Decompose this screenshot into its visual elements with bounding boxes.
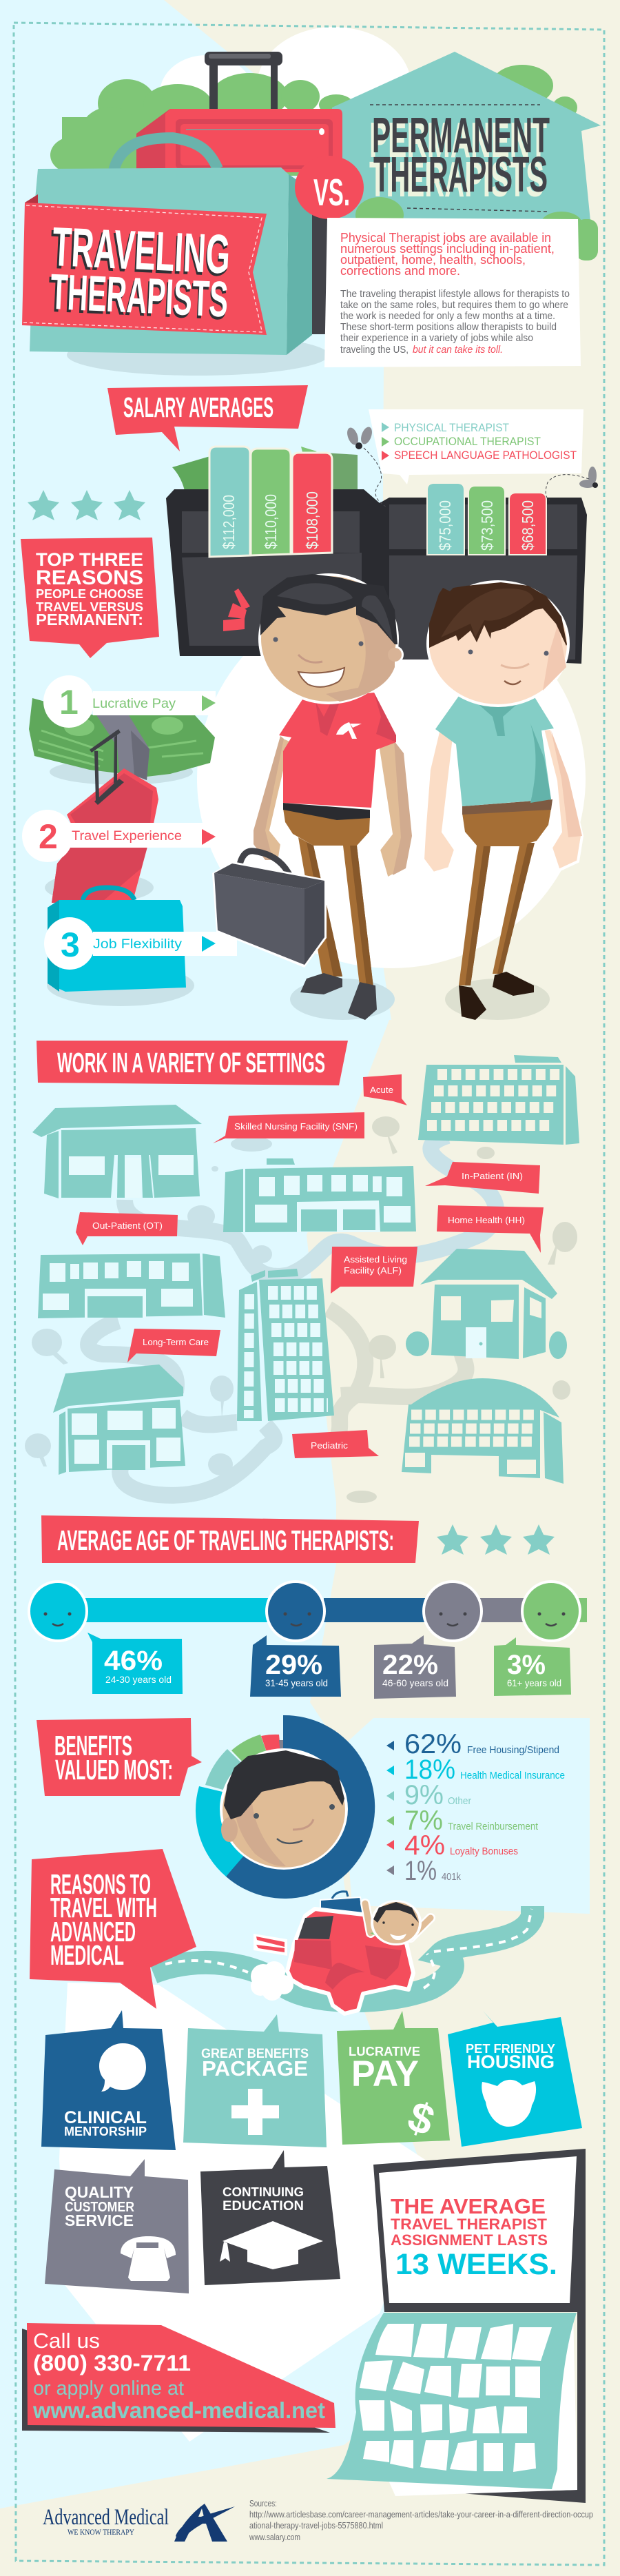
building: tower	[237, 1269, 334, 1421]
panel: intro text: but it can take its toll.	[413, 345, 503, 356]
stat: 62%	[386, 1729, 559, 1759]
callout: reasons to travel: MEDICAL	[50, 1939, 124, 1971]
card: continuing education: EDUCATION	[223, 2199, 304, 2214]
pants and belt	[283, 808, 370, 846]
panel: intro text: their experience in a variety of jobs while also	[340, 333, 533, 344]
illustration: luggage and house header	[22, 52, 601, 376]
wallets salary chart	[166, 447, 587, 664]
stat: 18%	[386, 1755, 565, 1785]
building: outpatient	[38, 1254, 225, 1318]
card: continuing education: CONTINUING	[223, 2185, 304, 2199]
heading: salary averages: SALARY AVERAGES	[123, 391, 273, 423]
stat: 18%: 18%	[404, 1755, 455, 1785]
character: permanent therapist	[423, 580, 582, 1020]
stat: 1%	[386, 1856, 462, 1886]
reason 3: Job Flexibility	[93, 937, 183, 952]
icon: briefcase	[212, 851, 327, 968]
salary values: permanent	[436, 500, 537, 551]
icon: calendar	[327, 2149, 586, 2503]
salary values: traveling: $108,000	[303, 491, 321, 549]
salary values: permanent: $68,500	[519, 500, 537, 551]
pants and belt	[462, 808, 551, 846]
label: assisted living: Facility (ALF)	[344, 1265, 402, 1276]
heading: benefits valued most: VALUED MOST:	[55, 1754, 173, 1786]
callout: 22%	[374, 1635, 456, 1699]
road network: settings	[88, 1136, 496, 1495]
stat: 62%: 62%	[404, 1729, 462, 1759]
panel: intro text: numerous settings including in-patient,	[340, 242, 555, 256]
callout: reasons to travel	[30, 1849, 196, 2009]
callout: 22%: 46-60 years old	[382, 1677, 448, 1688]
shadow under teal case	[67, 334, 329, 376]
callout: contact	[22, 2323, 335, 2433]
card: great benefits package: PACKAGE	[202, 2056, 308, 2081]
stat: 9%: Other	[448, 1796, 471, 1807]
callout: top three reasons: TRAVEL VERSUS	[36, 600, 143, 614]
label: snf: Skilled Nursing Facility (SNF)	[234, 1121, 358, 1132]
legs	[459, 843, 535, 985]
sources: ational-therapy-travel-jobs-5575880.html	[249, 2521, 383, 2531]
house	[331, 52, 601, 227]
stars left	[28, 490, 145, 520]
card: lucrative pay	[337, 2011, 450, 2145]
icon: pet head	[482, 2080, 536, 2127]
callout: top three reasons	[21, 538, 159, 658]
card: lucrative pay: $	[402, 2092, 440, 2145]
heading: benefits valued most: BENEFITS	[54, 1730, 132, 1761]
bag on car	[320, 1897, 363, 1914]
callout: 46%	[87, 1633, 183, 1694]
panel: intro text	[324, 218, 581, 367]
shirt	[279, 693, 396, 808]
icon: plus	[231, 2089, 279, 2135]
dust cloud	[251, 1961, 293, 2001]
icon: teal case	[30, 138, 312, 355]
heading: settings: WORK IN A VARIETY OF SETTINGS	[57, 1047, 325, 1079]
building: long-term care	[53, 1364, 185, 1475]
legend: OCCUPATIONAL THERAPIST	[394, 435, 541, 448]
building: home	[406, 1249, 567, 1359]
salary values: permanent: $73,500	[478, 500, 496, 551]
face: 24-30	[29, 1582, 87, 1641]
stat: 9%	[386, 1780, 471, 1810]
ribbon: traveling therapists: THERAPISTS	[49, 264, 229, 328]
label: assisted living	[331, 1247, 417, 1294]
wallet body	[166, 489, 587, 664]
icon: graduation cap	[220, 2221, 323, 2269]
panel: intro text: Physical Therapist jobs are available in	[340, 231, 551, 245]
callout: top three reasons: PERMANENT:	[36, 611, 143, 628]
motion lines	[254, 1934, 287, 1956]
heading: settings	[37, 1041, 348, 1085]
panel: intro text: traveling the US,	[340, 345, 409, 356]
shirt	[435, 696, 554, 806]
donut chart: benefits	[196, 1715, 375, 1899]
heading: average age	[41, 1515, 419, 1563]
building: inpatient	[223, 1158, 416, 1232]
head	[258, 573, 399, 704]
stat: 18%: Health Medical Insurance	[460, 1770, 565, 1781]
stat: 9%: 9%	[404, 1780, 444, 1810]
label: acute	[363, 1074, 407, 1105]
card: pet friendly housing	[448, 2011, 582, 2147]
label: long-term care: Long-Term Care	[143, 1337, 209, 1347]
panel: intro text: the work is needed for only a few months at a time.	[340, 311, 555, 322]
character: traveling therapist	[254, 573, 412, 1020]
label: in-patient: In-Patient (IN)	[462, 1171, 523, 1181]
face: 31-45	[267, 1582, 324, 1641]
callout: 29%: 31-45 years old	[265, 1677, 328, 1688]
ribbon: traveling therapists: TRAVELING	[51, 216, 231, 285]
card: lucrative pay: LUCRATIVE	[349, 2045, 420, 2058]
legend	[369, 409, 583, 484]
timeline: age groups	[29, 1582, 587, 1641]
callout: 29%	[250, 1635, 341, 1697]
card: great benefits package: GREAT BENEFITS	[201, 2047, 309, 2061]
reason 2: 2	[39, 817, 58, 856]
legend: benefits	[386, 1729, 565, 1886]
callout: top three reasons: REASONS	[36, 566, 143, 589]
label: pediatric	[292, 1430, 379, 1458]
stat: 4%: Loyalty Bonuses	[450, 1846, 518, 1857]
vs badge: VS.	[313, 171, 350, 214]
callout: reasons to travel: REASONS TO	[50, 1868, 151, 1900]
salary values: permanent: $75,000	[436, 500, 454, 551]
label: snf	[213, 1112, 364, 1143]
reason 3: 3	[61, 926, 80, 964]
label: assisted living: Assisted Living	[344, 1254, 407, 1265]
legs	[298, 837, 373, 987]
icon: flies	[345, 425, 598, 507]
label: home health	[437, 1205, 544, 1253]
icon: speech bubble	[99, 2043, 146, 2092]
callout: reasons to travel: TRAVEL WITH	[50, 1892, 157, 1923]
icon: logo mark	[174, 2504, 235, 2542]
stat: 7%: Travel Reinbursement	[448, 1821, 538, 1832]
stat: 4%: 4%	[404, 1830, 445, 1861]
vs badge	[295, 156, 364, 219]
shoes	[459, 985, 486, 1020]
footer logo: WE KNOW THERAPY	[68, 2527, 134, 2537]
bars: traveling salaries	[209, 447, 332, 557]
callout: top three reasons: PEOPLE CHOOSE	[36, 587, 143, 601]
callout: 3%: 61+ years old	[507, 1677, 561, 1688]
heading: salary averages	[107, 385, 308, 451]
arms	[254, 736, 291, 861]
footer logo: Advanced Medical	[43, 2505, 169, 2530]
stat: 7%: 7%	[404, 1806, 443, 1836]
label: out-patient: Out-Patient (OT)	[92, 1220, 163, 1231]
house bushes	[355, 197, 598, 260]
calendar sheet	[327, 2313, 577, 2489]
footer logo	[43, 2504, 235, 2542]
bushes	[50, 65, 577, 176]
card: quality customer service	[45, 2159, 189, 2293]
icon: red suitcase with handle	[136, 52, 342, 334]
card: pet friendly housing: PET FRIENDLY	[466, 2042, 555, 2056]
label: in-patient	[425, 1162, 540, 1194]
car	[287, 1909, 413, 2014]
suitcase handle	[90, 729, 124, 805]
reason 3	[44, 917, 237, 970]
callout: 29%: 29%	[265, 1650, 322, 1680]
reason 2: Travel Experience	[72, 829, 182, 844]
label: home health: Home Health (HH)	[448, 1215, 525, 1225]
card: clinical mentorship: CLINICAL	[64, 2108, 147, 2127]
shoes	[300, 973, 342, 994]
sources: www.salary.com	[249, 2533, 300, 2542]
callout: 46%: 46%	[104, 1646, 163, 1676]
waving driver	[365, 1900, 431, 1945]
callout: reasons to travel: ADVANCED	[50, 1916, 136, 1948]
arms	[423, 729, 455, 873]
stat: 7%	[386, 1806, 538, 1836]
calendar text: average assignment	[391, 2194, 557, 2281]
callout: 22%: 22%	[382, 1650, 438, 1680]
card: great benefits package	[183, 2014, 327, 2147]
legend: PHYSICAL THERAPIST	[394, 421, 509, 434]
callout: top three reasons: TOP THREE	[36, 549, 143, 570]
callout: 46%: 24-30 years old	[105, 1674, 172, 1685]
card: continuing education	[200, 2150, 340, 2285]
legend: SPEECH LANGUAGE PATHOLOGIST	[394, 449, 577, 462]
building: pediatric	[402, 1378, 564, 1484]
head in donut	[220, 1748, 348, 1870]
salary values: traveling: $112,000	[220, 495, 238, 549]
callout: contact: or apply online at	[33, 2378, 184, 2400]
icon: red suitcase	[45, 729, 158, 903]
bars: permanent salaries	[427, 483, 546, 555]
sources: Sources:	[249, 2499, 277, 2508]
stat: 1%: 1%	[404, 1856, 437, 1886]
card: quality customer service: QUALITY	[65, 2183, 134, 2201]
salary values: traveling: $110,000	[262, 494, 280, 549]
reason 1: 1	[59, 683, 79, 722]
shadows under feet	[290, 979, 550, 1020]
building: nursing facility	[32, 1105, 202, 1198]
logo on shirt	[336, 722, 362, 739]
panel: intro text: corrections and more.	[340, 264, 460, 278]
card: pet friendly housing: HOUSING	[467, 2052, 555, 2072]
sources	[249, 2499, 593, 2542]
panel: intro text: outpatient, home, health, schools,	[340, 253, 526, 267]
label: long-term care	[127, 1329, 220, 1362]
road with car	[153, 1892, 533, 2014]
card: lucrative pay: PAY	[351, 2054, 419, 2094]
icon: money stack	[29, 698, 215, 785]
card: clinical mentorship: MENTORSHIP	[64, 2125, 147, 2138]
calendar text: average assignment: ASSIGNMENT LASTS	[391, 2231, 548, 2249]
icon: telephone	[121, 2236, 176, 2281]
building: acute	[418, 1055, 579, 1145]
stat: 62%: Free Housing/Stipend	[467, 1745, 559, 1756]
reason 1	[43, 675, 216, 728]
calendar text: average assignment: TRAVEL THERAPIST	[391, 2216, 548, 2233]
ribbon: traveling therapists: TRAVELING	[49, 218, 231, 288]
stars right	[437, 1524, 555, 1555]
bills	[172, 447, 358, 498]
card: clinical mentorship	[41, 2010, 176, 2150]
heading: benefits valued most	[37, 1718, 202, 1796]
reason 1: Lucrative Pay	[92, 697, 176, 711]
face: 61+	[522, 1582, 580, 1641]
card: quality customer service: SERVICE	[65, 2211, 134, 2229]
callout: contact: (800) 330-7711	[33, 2351, 191, 2375]
calendar text: average assignment: THE AVERAGE	[391, 2194, 546, 2218]
icon: cyan case	[47, 888, 194, 1006]
head	[426, 580, 570, 707]
face: 46-60	[424, 1582, 482, 1641]
stat: 1%: 401k	[442, 1872, 462, 1883]
panel: intro text: These short-term positions allow therapists to build	[340, 322, 557, 333]
title: permanent therapists	[369, 108, 550, 207]
panel: intro text: The traveling therapist lifestyle allows for therapists to	[340, 289, 570, 300]
salary values: traveling	[220, 491, 321, 549]
callout: contact: Call us	[33, 2329, 100, 2353]
calendar text: average assignment: 13 WEEKS.	[395, 2248, 557, 2281]
callout: 3%	[494, 1637, 571, 1696]
reason 2	[22, 810, 216, 862]
label: acute: Acute	[370, 1085, 393, 1095]
label: pediatric: Pediatric	[311, 1440, 349, 1451]
ribbon: traveling therapists	[22, 194, 267, 335]
callout: contact: www.advanced-medical.net	[32, 2398, 325, 2423]
trees	[25, 1136, 272, 1475]
callout: 3%: 3%	[507, 1650, 546, 1680]
label: out-patient	[76, 1212, 178, 1245]
panel: intro text: take on the same roles, but requires them to go where	[340, 300, 568, 311]
stat: 4%	[386, 1830, 518, 1861]
card: quality customer service: CUSTOMER	[65, 2200, 134, 2215]
icon: excitement lines	[223, 589, 250, 631]
ribbon: traveling therapists: THERAPISTS	[47, 267, 229, 331]
